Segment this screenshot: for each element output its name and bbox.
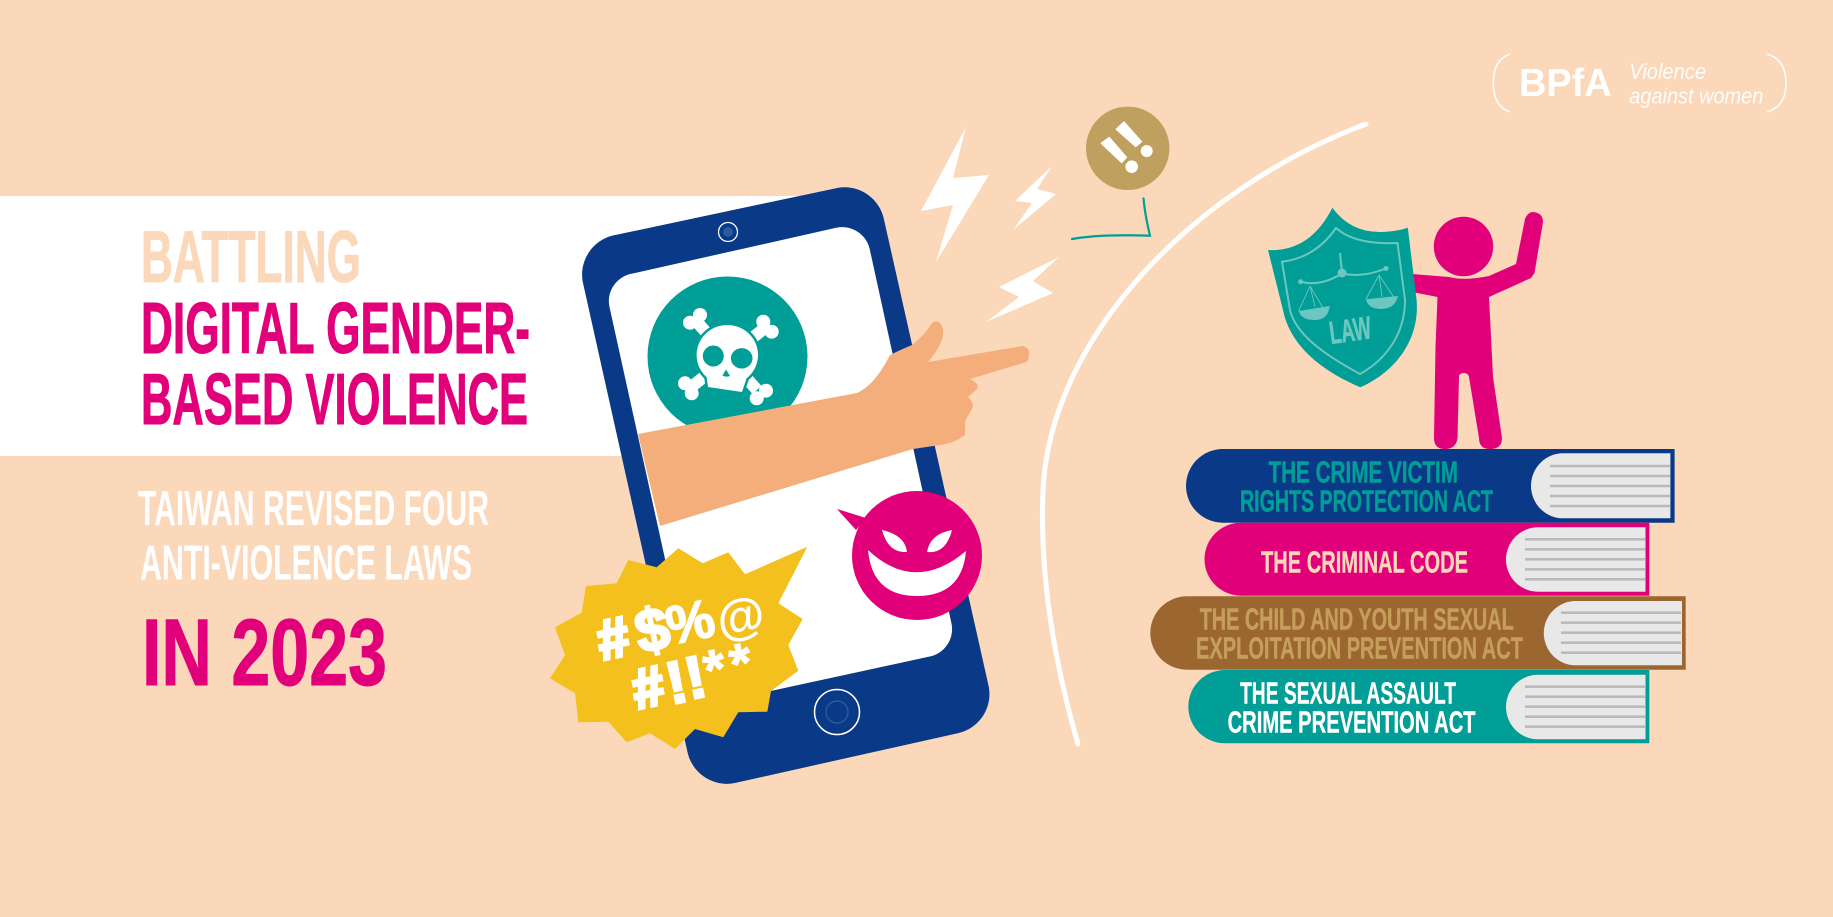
white title band	[0, 196, 800, 456]
grawlix characters: !	[679, 643, 712, 712]
heading line: based violence: BASED VIOLENCE	[141, 360, 528, 440]
person	[1412, 212, 1543, 449]
camera	[718, 222, 738, 242]
grawlix characters	[591, 586, 770, 721]
subtitle block	[138, 482, 489, 706]
book: sexual assault crime prevention act: CRIME PREVENTION ACT	[1228, 705, 1476, 740]
grawlix characters: $	[629, 594, 676, 666]
icons: lightning bolts	[921, 127, 1059, 322]
heading line: digital gender: DIGITAL GENDER-	[141, 289, 530, 369]
arm pointing out of phone	[638, 321, 1029, 526]
book: sexual assault crime prevention act	[1188, 670, 1649, 743]
subtitle line one: TAIWAN REVISED FOUR	[138, 482, 489, 536]
grawlix characters: *	[724, 630, 758, 696]
icon: devil face speech bubble	[837, 491, 982, 620]
book: crime victim rights protection act: RIGHTS PROTECTION ACT	[1240, 484, 1493, 519]
book: crime victim rights protection act	[1186, 449, 1675, 523]
grawlix characters: *	[698, 636, 732, 702]
home button	[814, 690, 860, 734]
phone screen	[609, 227, 952, 703]
stack of law books	[1150, 449, 1686, 743]
grawlix characters: !	[660, 648, 693, 717]
book: child and youth sexual exploitation prevention act: EXPLOITATION PREVENTION ACT	[1196, 631, 1523, 666]
law label: LAW	[1327, 309, 1374, 351]
book: child and youth sexual exploitation prevention act	[1150, 596, 1686, 670]
logo: BPfA violence against women	[1493, 54, 1786, 112]
speech burst with grawlix	[550, 547, 807, 749]
grawlix characters: #	[591, 604, 635, 672]
book: crime victim rights protection act: THE CRIME VICTIM	[1268, 454, 1458, 489]
scales of justice	[1298, 253, 1398, 320]
teal pointer stroke	[1072, 198, 1150, 239]
grawlix characters: @	[712, 586, 770, 649]
icon: gold exclamation badge	[1086, 107, 1169, 190]
title block	[141, 217, 530, 440]
book: sexual assault crime prevention act: THE SEXUAL ASSAULT	[1240, 675, 1456, 710]
white curved divider	[1042, 124, 1366, 744]
phone illustration	[550, 187, 1029, 784]
book: criminal code	[1204, 523, 1649, 596]
logo: BPfA violence against women: Violence	[1629, 59, 1706, 84]
grawlix characters: #	[626, 653, 670, 721]
phone body	[582, 187, 989, 784]
law shield	[1268, 208, 1417, 387]
icon: skull and crossbones	[648, 276, 808, 436]
icon: person holding shield	[1268, 208, 1543, 449]
subtitle line two: ANTI-VIOLENCE LAWS	[140, 536, 472, 590]
book: child and youth sexual exploitation prevention act: THE CHILD AND YOUTH SEXUAL	[1200, 601, 1514, 636]
logo: BPfA violence against women: BPfA	[1519, 62, 1612, 105]
logo: BPfA violence against women: against women	[1629, 83, 1763, 108]
heading word: battling: BATTLING	[141, 217, 361, 298]
grawlix characters: %	[661, 588, 720, 657]
year: IN 2023	[142, 600, 387, 706]
book: criminal code: THE CRIMINAL CODE	[1261, 544, 1468, 579]
